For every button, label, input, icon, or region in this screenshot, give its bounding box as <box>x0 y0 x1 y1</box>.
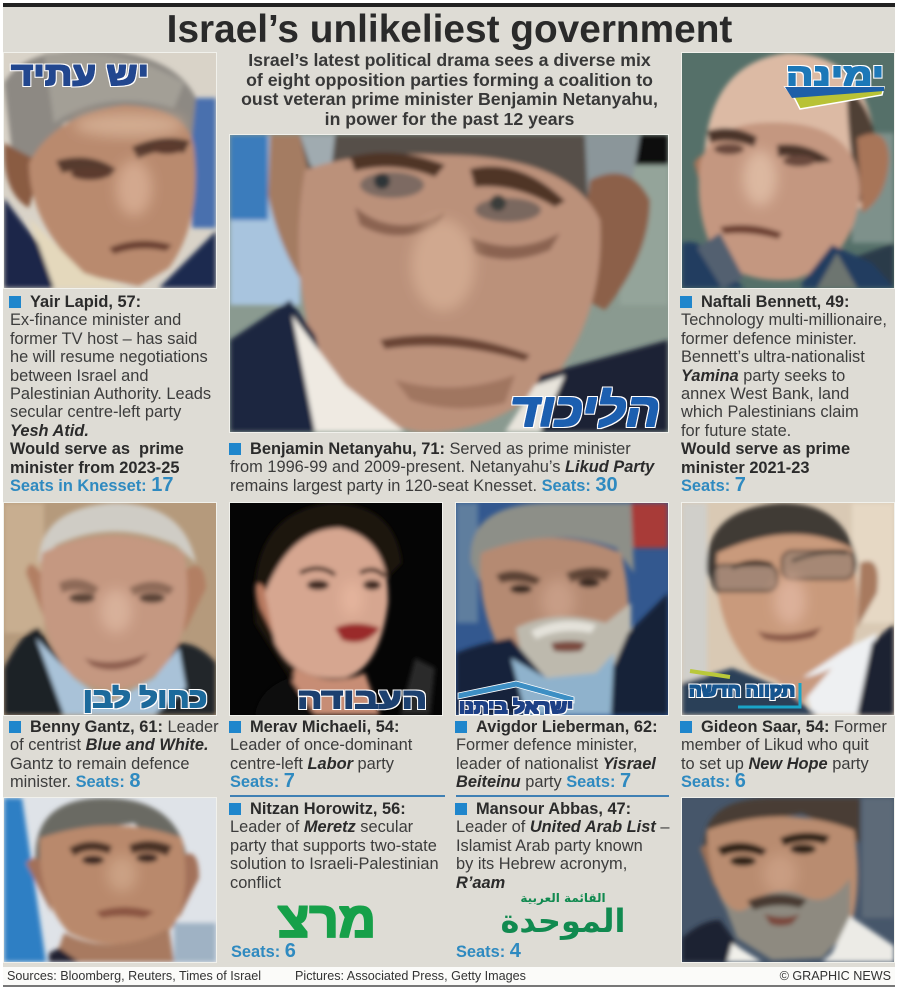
picture credits: Pictures: Associated Press, Getty Images <box>295 969 526 983</box>
text: Avigdor Lieberman: leader of nationalist Yisrael <box>456 755 656 773</box>
sources: Sources: Bloomberg, Reuters, Times of Israel <box>7 969 261 983</box>
text: Benny Gantz <box>9 718 219 792</box>
text: Mansour Abbas: R’aam <box>456 874 505 892</box>
intro text: of eight opposition parties forming a coalition to <box>246 70 653 90</box>
text: Merav Michaeli: Seats: 7 <box>230 770 295 792</box>
title: Israel’s unlikeliest government <box>167 8 732 51</box>
text: Nitzan Horowitz <box>229 800 439 962</box>
text: Avigdor Lieberman: Avigdor Lieberman, 62: <box>476 718 658 736</box>
text: Yair Lapid: between Israel and <box>10 367 149 385</box>
text: Naftali Bennett: Naftali Bennett, 49: <box>701 293 849 311</box>
text: Gideon Saar: Seats: 6 <box>681 770 746 792</box>
intro text <box>241 50 658 129</box>
text: Avigdor Lieberman <box>455 718 658 792</box>
text: Yair Lapid: former TV host – has said <box>10 330 197 348</box>
text: Naftali Bennett: Yamina party seeks to <box>681 367 845 385</box>
text: Yair Lapid: Yesh Atid. <box>10 422 89 440</box>
photo: Nitzan Horowitz <box>3 797 217 963</box>
text: Benjamin Netanyahu: from 1996-99 and 2009-present. Netanyahu’s Likud Party <box>230 458 654 476</box>
logo: Labor: העבודה <box>297 684 427 714</box>
logo: Yesh Atid: יש עתיד <box>11 56 149 92</box>
text: Gideon Saar: Gideon Saar, 54: Former <box>701 718 887 736</box>
text: Naftali Bennett <box>680 293 887 496</box>
logo: United Arab List: الموحدة <box>501 902 625 940</box>
text: Merav Michaeli <box>229 718 412 792</box>
text: Yair Lapid <box>9 293 211 496</box>
logo: Yamina <box>785 59 884 109</box>
intro text: Israel’s latest political drama sees a diverse mix <box>248 50 651 70</box>
top rule <box>3 3 895 7</box>
text: Mansour Abbas: Islamist Arab party known <box>456 837 643 855</box>
text: Avigdor Lieberman: Beiteinu party Seats: 7 <box>456 770 631 792</box>
text: Mansour Abbas: Leader of United Arab List – <box>456 818 669 836</box>
text: Yair Lapid: Yair Lapid, 57: <box>30 293 141 311</box>
photo: Naftali Bennett <box>681 52 895 289</box>
text: Nitzan Horowitz: Nitzan Horowitz, 56: <box>250 800 406 818</box>
seats: Meretz: Seats: 6 <box>231 940 296 962</box>
text: Mansour Abbas: by its Hebrew acronym, <box>456 855 627 873</box>
photo: Avigdor Lieberman <box>455 502 669 716</box>
text: Avigdor Lieberman: Former defence minister, <box>456 736 637 754</box>
photo: Merav Michaeli <box>229 502 443 716</box>
text: Benny Gantz: Benny Gantz, 61: Leader <box>30 718 219 736</box>
photo: Mansour Abbas <box>681 797 895 963</box>
text: Naftali Bennett: annex West Bank, land <box>681 385 849 403</box>
text: Naftali Bennett: former defence minister. <box>681 330 857 348</box>
logo: Yamina: ימינה <box>786 59 884 92</box>
intro text: oust veteran prime minister Benjamin Netanyahu, <box>241 89 658 109</box>
text: Naftali Bennett: Seats: 7 <box>681 474 746 496</box>
photo: Benny Gantz <box>3 502 217 716</box>
text: Yair Lapid: minister from 2023-25 <box>10 459 179 477</box>
text: Naftali Bennett: Bennett’s ultra-nationalist <box>681 348 865 366</box>
photo: Gideon Saar <box>681 502 895 716</box>
text: Yair Lapid: he will resume negotiations <box>10 348 208 366</box>
text: Nitzan Horowitz: Leader of Meretz secular <box>230 818 413 836</box>
text: Mansour Abbas: Mansour Abbas, 47: <box>476 800 631 818</box>
logo: New Hope: תקווה חדשה <box>689 681 795 700</box>
text: Benny Gantz: of centrist Blue and White. <box>10 736 209 754</box>
text: Merav Michaeli: Leader of once-dominant <box>230 736 412 754</box>
text: Yair Lapid: Ex-finance minister and <box>10 311 181 329</box>
logo: New Hope <box>689 671 800 707</box>
footer band <box>3 967 895 985</box>
text: Merav Michaeli: Merav Michaeli, 54: <box>250 718 399 736</box>
text: Benny Gantz: minister. Seats: 8 <box>10 770 140 792</box>
text: Naftali Bennett: Would serve as prime <box>681 440 850 458</box>
text: Naftali Bennett: minister 2021-23 <box>681 459 809 477</box>
seats: United Arab List: Seats: 4 <box>456 940 521 962</box>
intro text: in power for the past 12 years <box>325 109 574 129</box>
text: Yair Lapid: Palestinian Authority. Leads <box>10 385 211 403</box>
text: Nitzan Horowitz: party that supports two-state <box>230 837 437 855</box>
copyright: © GRAPHIC NEWS <box>780 969 891 983</box>
text: Mansour Abbas <box>455 800 670 962</box>
text: Gideon Saar: to set up New Hope party <box>681 755 869 773</box>
text: Yair Lapid: Seats in Knesset: 17 <box>10 474 173 496</box>
logo: Blue and White: כחול לבן <box>83 683 207 713</box>
text: Gideon Saar <box>680 718 887 792</box>
text: Gideon Saar: member of Likud who quit <box>681 736 869 754</box>
photo: Yair Lapid <box>3 52 217 289</box>
text: Benjamin Netanyahu: remains largest party in 120-seat Knesset. Seats: 30 <box>230 474 618 496</box>
text: Benjamin Netanyahu <box>229 440 655 496</box>
text: Benny Gantz: Gantz to remain defence <box>10 755 190 773</box>
text: Benjamin Netanyahu: Benjamin Netanyahu, 71: Served as prime minister <box>250 440 631 458</box>
logo: United Arab List: القائمة العربية <box>520 891 606 905</box>
text: Nitzan Horowitz: conflict <box>230 874 281 892</box>
text: Nitzan Horowitz: solution to Israeli-Palestinian <box>230 855 439 873</box>
text: Yair Lapid: secular centre-left party <box>10 403 181 421</box>
text: Naftali Bennett: which Palestinians claim <box>681 403 859 421</box>
logo: Yisrael Beiteinu <box>458 681 574 717</box>
text: Yair Lapid: Would serve as prime <box>10 440 184 458</box>
text: Naftali Bennett: for future state. <box>681 422 791 440</box>
photo: Benjamin Netanyahu <box>229 134 669 433</box>
text: Merav Michaeli: centre-left Labor party <box>230 755 394 773</box>
text: Naftali Bennett: Technology multi-millionaire, <box>681 311 887 329</box>
